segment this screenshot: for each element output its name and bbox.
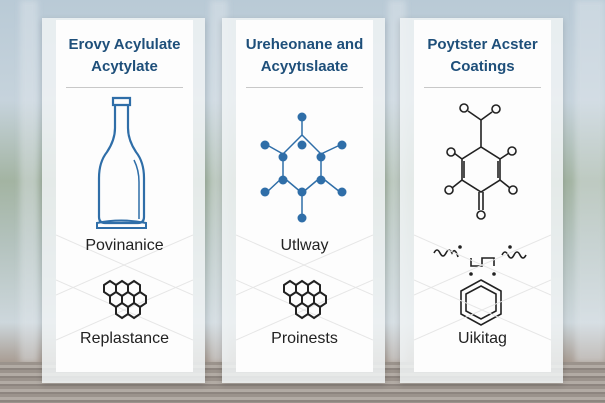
title: Coatings (450, 58, 515, 75)
label: Uikitag (458, 330, 507, 347)
label: Povinanice (85, 237, 164, 254)
title: Poytster Acster (427, 36, 538, 53)
panel: urethane acrylate (222, 18, 385, 383)
icon: molecule (236, 112, 373, 340)
icon: bottle (56, 96, 193, 340)
title (246, 36, 363, 75)
title (427, 36, 538, 75)
panel: epoxy acrylate (42, 18, 205, 383)
title: Acytylate (91, 58, 158, 75)
label: Replastance (80, 330, 169, 347)
title: Ureheonane and (246, 36, 363, 53)
label: Proinests (271, 330, 338, 347)
title: Acyytıslaate (261, 58, 348, 75)
title (68, 36, 180, 75)
icon: ring molecule (414, 103, 551, 340)
label: Utlway (280, 237, 328, 254)
panel: polyester acrylate (400, 18, 563, 383)
title: Erovy Acylulate (68, 36, 180, 53)
